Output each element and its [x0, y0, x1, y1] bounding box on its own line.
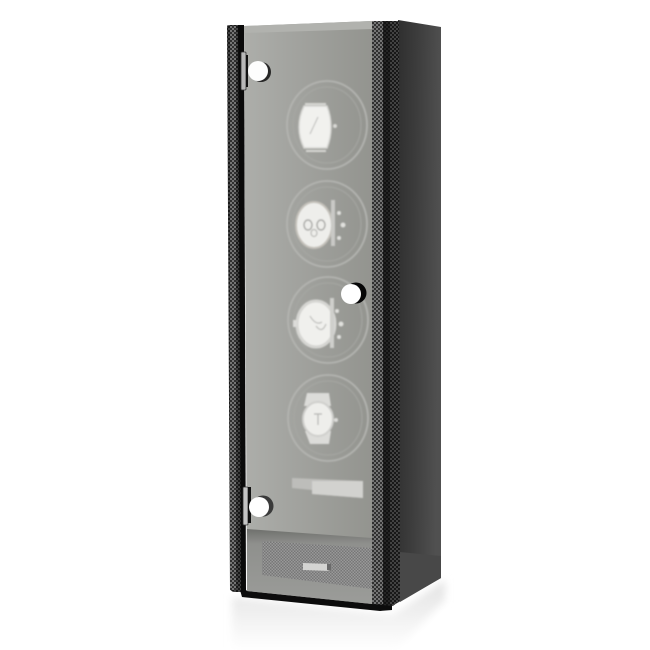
watch 4: steel bracelet: [303, 393, 338, 444]
drawer handle: [303, 563, 331, 571]
logo plate: [292, 478, 363, 498]
watch slot 4: [288, 375, 368, 461]
cabinet base: [240, 590, 392, 611]
bottom hinge: [243, 487, 274, 525]
hinge pin hole and chrome knob: [251, 62, 271, 82]
watch slot 1: [287, 81, 367, 169]
left carbon strip: [227, 25, 246, 592]
lower dark band: [247, 529, 372, 604]
watch slot 3: [288, 277, 368, 363]
top hinge: [241, 52, 271, 90]
side panel lower reflection: [400, 552, 441, 602]
middle lock knob: [341, 282, 366, 304]
watch 1: tonneau: [299, 104, 337, 151]
right carbon strip: [372, 21, 400, 606]
drawer: [262, 541, 372, 589]
hinge pin hole and chrome knob: [252, 496, 274, 516]
watch 3: chronograph: [293, 298, 344, 348]
glass top edge highlight: [244, 21, 372, 33]
glass door: [244, 21, 372, 604]
floor reflection: [232, 580, 445, 650]
cabinet side panel: [392, 20, 441, 606]
watch slot 2: [287, 181, 367, 267]
watch 2: chronograph: [296, 200, 346, 248]
